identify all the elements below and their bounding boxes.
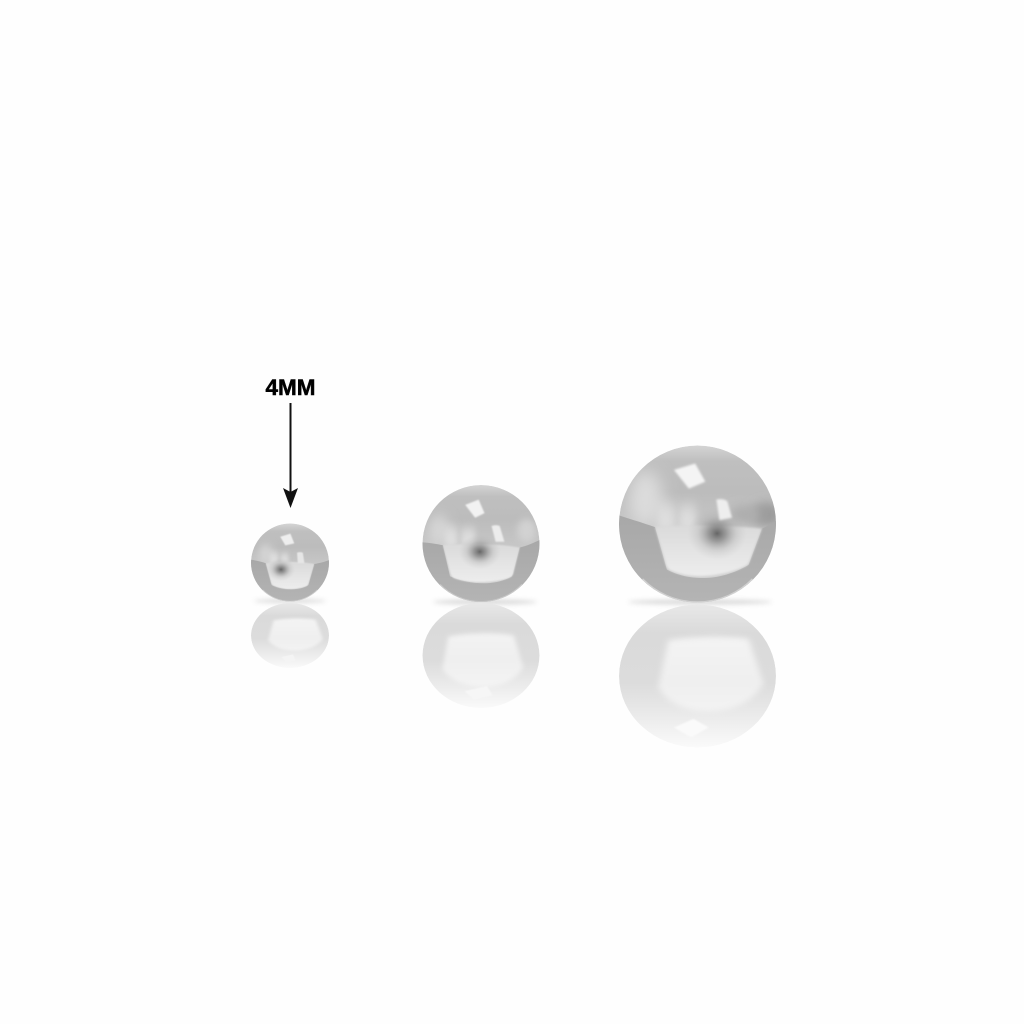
arrow pointing to small sphere bbox=[283, 403, 298, 508]
size label: 4MM: 4MM bbox=[266, 375, 316, 400]
large sphere reflection bbox=[619, 604, 776, 748]
infographic canvas bbox=[251, 379, 776, 742]
small sphere bbox=[251, 524, 329, 602]
large sphere bbox=[619, 446, 784, 602]
medium sphere bbox=[422, 485, 540, 602]
floor shadows bbox=[254, 599, 772, 604]
small sphere reflection bbox=[251, 603, 329, 668]
medium sphere reflection bbox=[422, 603, 540, 708]
